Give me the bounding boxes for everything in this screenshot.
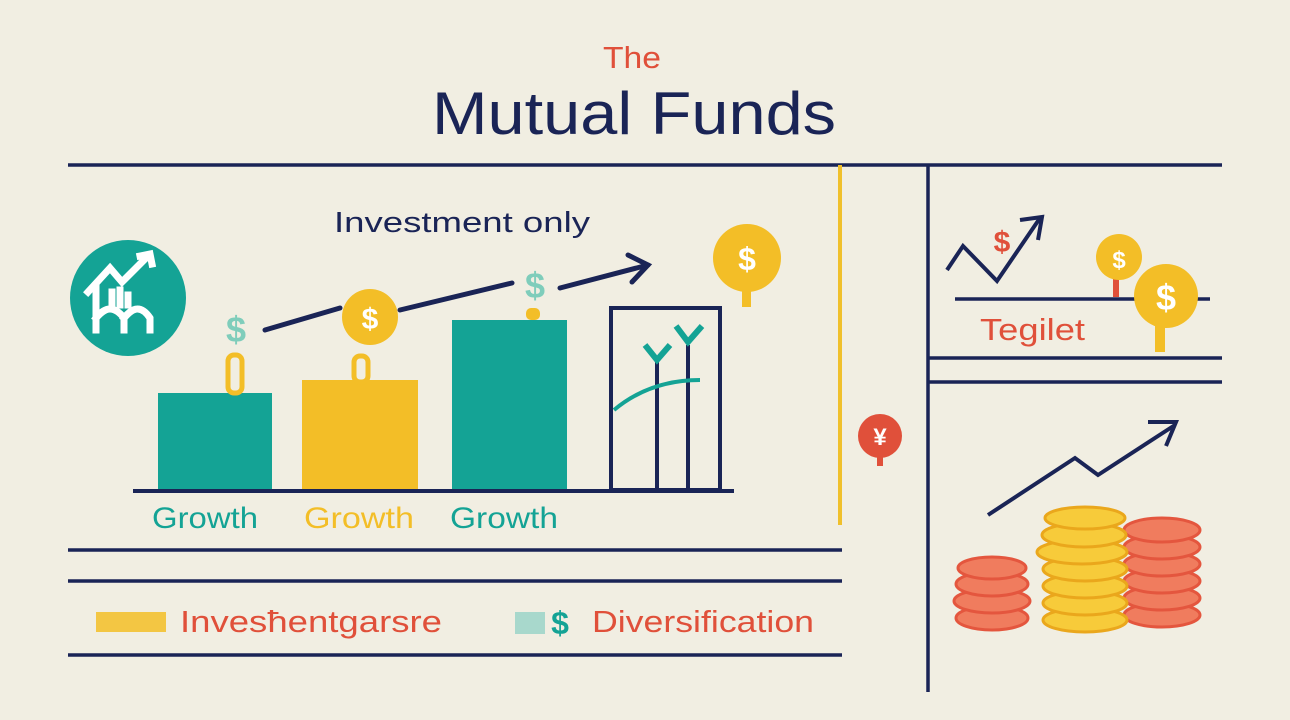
panel: top right: Tegilet — [980, 312, 1085, 347]
labels: growth — [152, 502, 558, 535]
labels: growth: Growth — [304, 502, 414, 535]
bar chart: growth: $ — [226, 309, 246, 350]
labels: growth: Growth — [152, 502, 258, 535]
title: The — [603, 40, 661, 75]
title — [432, 40, 836, 147]
heading: investment only: Investment only — [334, 207, 591, 239]
icon: yen — [858, 414, 902, 466]
panel: coins and growth arrow — [954, 422, 1200, 632]
panel: top right: $ — [1112, 247, 1126, 274]
bottom labels — [96, 604, 814, 641]
bar chart: growth — [133, 224, 781, 491]
panel: top right: $ — [1156, 277, 1176, 318]
panel: top right — [947, 217, 1210, 352]
bottom labels: $ — [551, 605, 569, 641]
labels: growth: Growth — [450, 502, 558, 535]
title: Mutual Funds — [432, 80, 836, 147]
bar chart: growth: $ — [525, 265, 545, 306]
icon: yen: ¥ — [873, 424, 887, 451]
bar chart: growth: $ — [738, 241, 756, 277]
bottom labels: Invesħentgarsre — [180, 604, 442, 639]
bottom labels: Diversification — [592, 604, 814, 639]
panel: top right: $ — [994, 226, 1011, 259]
icon: teal house circle — [70, 240, 186, 356]
bar chart: growth: $ — [362, 303, 379, 336]
